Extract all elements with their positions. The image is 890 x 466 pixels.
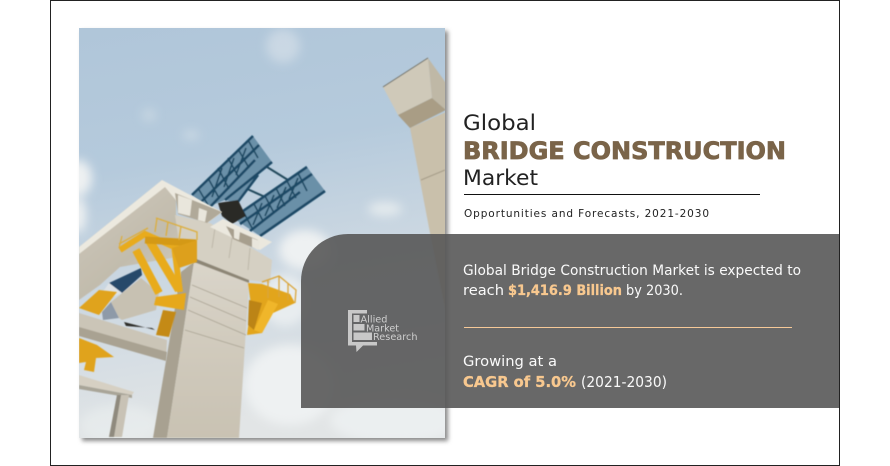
overlay panel xyxy=(301,234,839,408)
market size statement: Global Bridge Construction Market is expected to xyxy=(463,263,801,279)
subtitle: Opportunities and Forecasts, 2021-2030 xyxy=(464,208,709,220)
logo wordmark xyxy=(360,314,418,343)
logo wordmark: Research xyxy=(373,332,418,343)
steel trusses xyxy=(192,136,325,236)
panel divider xyxy=(464,327,792,328)
deck end sections xyxy=(175,193,222,223)
pillar head xyxy=(175,215,272,283)
logo wordmark: Allied xyxy=(360,314,388,326)
heading line: Global: Global xyxy=(463,111,536,136)
market size statement: reach xyxy=(463,283,504,299)
growth statement xyxy=(463,354,667,391)
heading xyxy=(463,111,786,191)
logo: Allied Market Research xyxy=(348,310,418,352)
photo shadow xyxy=(82,31,448,441)
market size statement: by 2030. xyxy=(626,283,683,299)
market size statement: $1,416.9 Billion xyxy=(508,283,622,299)
market size statement xyxy=(463,263,801,299)
growth statement: CAGR of 5.0% xyxy=(463,373,576,391)
far bracket and lower beams xyxy=(79,180,222,437)
photo: bridge under construction xyxy=(64,28,460,445)
heading line: Bridge Construction: BRIDGE CONSTRUCTION xyxy=(463,137,786,165)
logo wordmark: Market xyxy=(366,323,399,334)
heading line: Market: Market xyxy=(463,166,538,191)
yellow form travellers xyxy=(79,218,296,337)
main pillar xyxy=(153,193,272,438)
logo mark xyxy=(348,310,377,352)
growth statement: (2021-2030) xyxy=(581,373,667,391)
right pillar xyxy=(382,57,445,234)
heading rule xyxy=(464,194,760,195)
growth statement: Growing at a xyxy=(463,354,557,370)
